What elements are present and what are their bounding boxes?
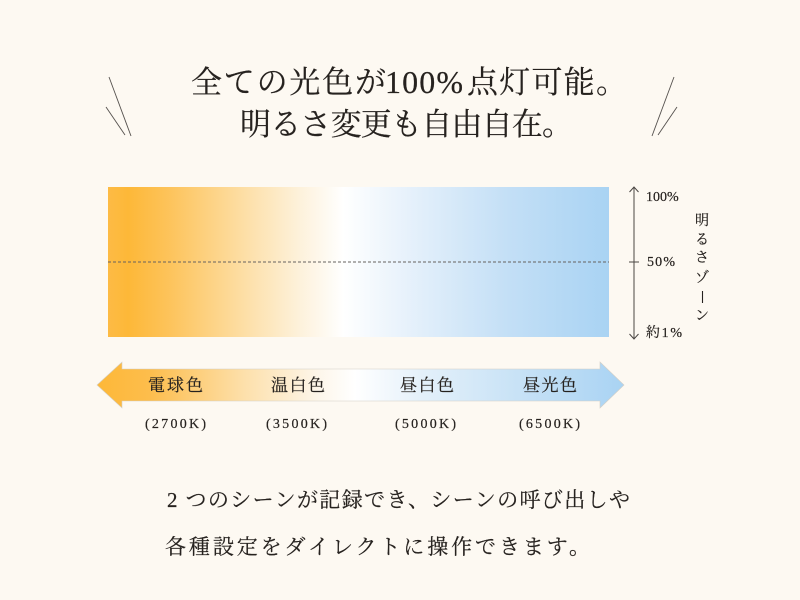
color temperature names: 昼白色 bbox=[400, 376, 454, 395]
right accent lines bbox=[652, 77, 677, 136]
brightness zone vertical label: ゾ bbox=[695, 270, 709, 286]
brightness axis labels: 約1% bbox=[646, 325, 682, 341]
title: 明るさ変更も自由自在。 bbox=[240, 107, 573, 142]
brightness axis arrow bbox=[629, 187, 639, 339]
kelvin values: (6500K) bbox=[519, 417, 580, 432]
color temperature names bbox=[148, 376, 577, 395]
color temperature names: 電球色 bbox=[148, 376, 203, 395]
brightness zone vertical label: ン bbox=[695, 309, 709, 324]
left accent lines bbox=[106, 77, 131, 136]
title: 100% bbox=[385, 64, 463, 100]
title: 全ての光色が bbox=[191, 65, 386, 100]
title: 点灯可能。 bbox=[467, 65, 627, 100]
kelvin values: (2700K) bbox=[145, 417, 206, 432]
brightness axis labels: 100% bbox=[646, 190, 679, 205]
description text bbox=[165, 488, 630, 559]
brightness zone vertical label bbox=[695, 213, 709, 324]
title bbox=[191, 64, 627, 142]
brightness axis labels bbox=[646, 190, 682, 341]
brightness zone vertical label: 明 bbox=[695, 213, 709, 229]
color temperature names: 昼光色 bbox=[523, 376, 577, 395]
50% dashed line bbox=[108, 261, 609, 263]
brightness axis labels: 50% bbox=[647, 255, 675, 270]
brightness zone vertical label: さ bbox=[695, 251, 709, 266]
description text: 各種設定をダイレクトに操作できます。 bbox=[165, 535, 590, 559]
color temperature names: 温白色 bbox=[271, 376, 325, 395]
description text: 2 つのシーンが記録でき、シーンの呼び出しや bbox=[167, 488, 630, 512]
kelvin values: (5000K) bbox=[395, 417, 456, 432]
color and brightness gradient band bbox=[108, 187, 609, 337]
kelvin values: (3500K) bbox=[266, 417, 327, 432]
kelvin values bbox=[145, 417, 580, 432]
brightness zone vertical label: る bbox=[695, 233, 709, 248]
color temperature double arrow bbox=[97, 362, 624, 408]
